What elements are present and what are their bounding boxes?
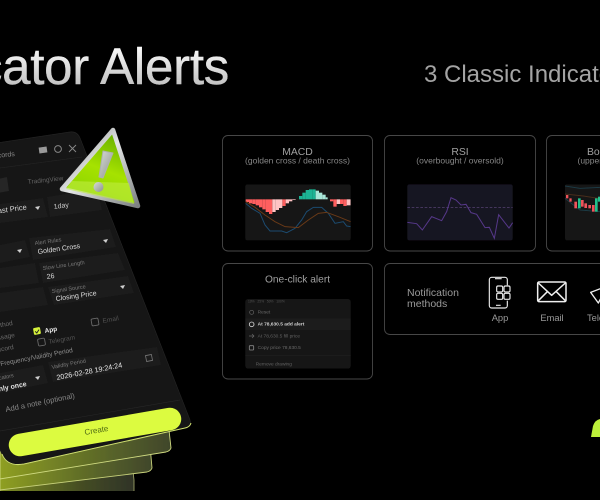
field: signal source: Signal Source: [51, 284, 86, 295]
field: timeframe: 1day: [53, 202, 70, 211]
button: Create: [20, 419, 170, 445]
card: RSI: [384, 136, 536, 251]
card title: RSI: [451, 147, 469, 158]
field: slow line length: [39, 253, 125, 283]
field: signal source: Closing Price: [55, 290, 97, 303]
card: MACD: [222, 136, 372, 251]
Bollinger chart: [565, 184, 600, 240]
lime corner shape: [591, 419, 600, 437]
panel body: [0, 132, 190, 465]
field: signal left: [0, 287, 48, 312]
card: Bollinger Bands: [546, 136, 600, 251]
checkbox: Email: Email: [102, 315, 120, 325]
exclamation dot: [94, 182, 104, 192]
field: alert rules: [29, 229, 116, 260]
card: Notification methods: [384, 264, 600, 334]
field: validity period: Validity Period: [51, 358, 86, 371]
notification heading: methods: [407, 298, 447, 310]
RSI chart: [407, 184, 513, 240]
icon: email: [538, 282, 566, 302]
field: note: Add a note (optional): [5, 391, 76, 414]
icon: app: [489, 277, 511, 308]
context menu: Remove drawing: [256, 361, 292, 367]
field: slow line length: Slow Line Length: [42, 260, 85, 272]
exclamation bar: [99, 151, 113, 178]
MACD chart: [245, 184, 351, 240]
context menu: At 78,630.5 add alert: [258, 322, 305, 328]
checkbox: App: App: [44, 326, 58, 335]
checkbox: Email: [91, 315, 120, 326]
field: alert rules: Alert Rules: [34, 237, 62, 247]
field: frequency: [0, 365, 48, 394]
field: slow line length: 26: [46, 273, 55, 281]
notification method labels: [0, 320, 16, 355]
context menu: Copy price 78,630.5: [258, 345, 301, 351]
notification heading: Notification: [407, 287, 459, 299]
card title: MACD: [282, 147, 313, 158]
label: App: App: [492, 313, 508, 323]
field: indicator: [0, 240, 30, 263]
field: price source: [0, 198, 48, 223]
panel: alert form: [0, 132, 191, 465]
icon: telegram: [591, 281, 600, 305]
triangle light band: [66, 181, 134, 204]
context menu: At 78,630.5 fill price: [258, 333, 300, 339]
checkbox: App: [33, 326, 58, 335]
MACD lines: [246, 203, 351, 233]
card: One-click alert: [222, 264, 372, 379]
context menu: [245, 299, 351, 369]
tab row: [0, 157, 82, 193]
field: alert rules: Golden Cross: [37, 243, 81, 256]
panel lime bottom edge: [2, 423, 191, 465]
field: validity period: 2026-02-28 19:24:24: [56, 360, 123, 382]
field: validity period: [48, 347, 161, 382]
checkbox: Telegram: Telegram: [48, 334, 76, 346]
context menu: Reset: [258, 310, 271, 316]
field: note: [0, 373, 180, 431]
context menu: 10% 25% 50% 100%: [248, 299, 285, 303]
icon: warning triangle: [62, 130, 138, 206]
card title: One-click alert: [265, 274, 330, 286]
card subtitle: (golden cross / death cross): [245, 156, 350, 166]
stacked layers behind panel: [0, 432, 172, 491]
header icons: [39, 145, 76, 154]
field: signal source: [48, 276, 134, 305]
card subtitle: (overbought / oversold): [416, 156, 504, 166]
field: fast line length: [0, 263, 39, 288]
button: Create: Create: [84, 424, 110, 437]
label: Email: Email: [540, 313, 564, 323]
field: timeframe: [47, 189, 102, 217]
tab row: TradingView: [27, 175, 64, 186]
